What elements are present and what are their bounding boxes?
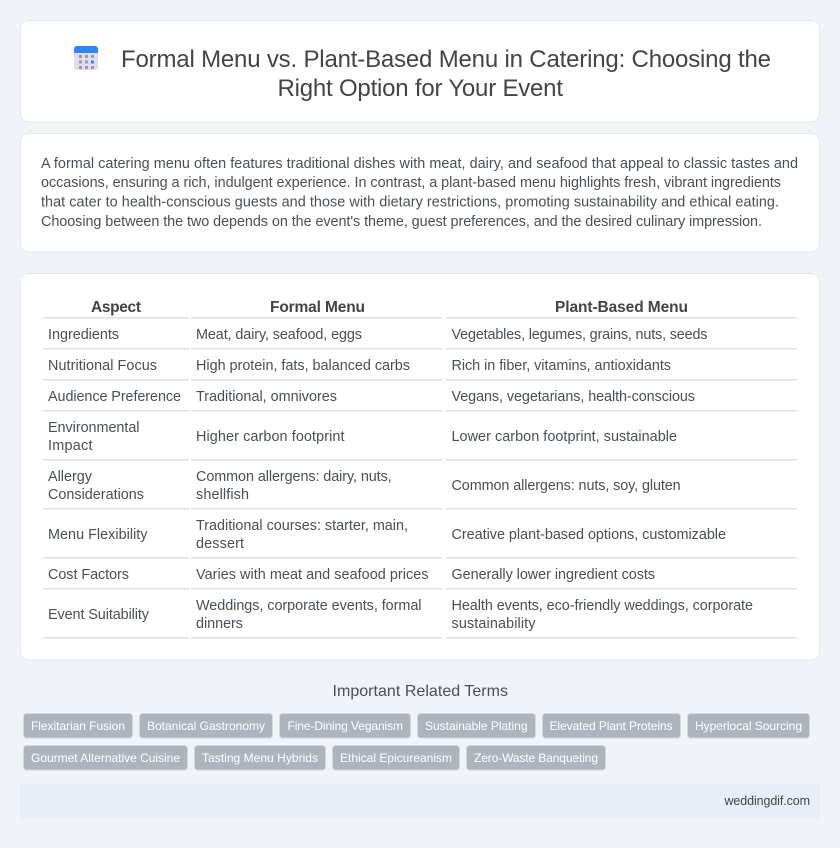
related term chips: Gourmet Alternative Cuisine <box>31 751 180 765</box>
panel: introduction text: A formal catering menu often features traditional dishes with meat, dairy, and seafood that appeal to classic tastes and <box>41 156 798 172</box>
row: menu flexibility: dessert <box>196 536 244 552</box>
row: allergy considerations: Considerations <box>48 487 144 503</box>
row: ingredients <box>48 327 708 343</box>
row: ingredients: Ingredients <box>48 327 119 343</box>
row: nutritional focus: Nutritional Focus <box>48 358 157 374</box>
related term chips: Elevated Plant Proteins <box>550 719 672 733</box>
title: Right Option for Your Event <box>278 75 563 102</box>
row: menu flexibility: Menu Flexibility <box>48 527 148 543</box>
related term chips: Botanical Gastronomy <box>147 719 265 733</box>
row: nutritional focus: High protein, fats, balanced carbs <box>196 358 410 374</box>
row: environmental impact: Impact <box>48 438 92 454</box>
row: environmental impact <box>48 420 677 454</box>
related term chips: Fine-Dining Veganism <box>288 719 403 733</box>
related term chips <box>24 714 810 770</box>
table header row: Plant-Based Menu <box>555 299 688 316</box>
row: audience preference <box>48 389 695 405</box>
related term chips: Ethical Epicureanism <box>340 751 452 765</box>
heading: important related terms: Important Related Terms <box>332 683 508 700</box>
icon: calendar <box>74 46 98 70</box>
row: audience preference: Traditional, omnivores <box>196 389 337 405</box>
row: nutritional focus: Rich in fiber, vitamins, antioxidants <box>452 358 671 374</box>
row: event suitability: Health events, eco-friendly weddings, corporate <box>452 598 753 614</box>
table header row: Formal Menu <box>270 299 365 316</box>
row: environmental impact: Lower carbon footprint, sustainable <box>452 429 677 445</box>
row: cost factors: Cost Factors <box>48 567 129 583</box>
footer <box>20 784 820 818</box>
row: nutritional focus <box>48 358 671 374</box>
footer: weddingdif.com <box>724 794 810 808</box>
panel: title header <box>20 20 820 122</box>
row: menu flexibility: Traditional courses: starter, main, <box>196 518 408 534</box>
panel: introduction text <box>20 134 820 252</box>
panel: comparison table <box>20 274 820 660</box>
panel: introduction text: that cater to health-conscious guests and those with dietary restrictions, promoting sustainability and ethical eating. <box>41 194 779 210</box>
table header row: Aspect <box>91 299 141 316</box>
row: cost factors <box>48 567 655 583</box>
row: cost factors: Generally lower ingredient costs <box>452 567 655 583</box>
row: ingredients: Meat, dairy, seafood, eggs <box>196 327 362 343</box>
row: cost factors: Varies with meat and seafood prices <box>196 567 428 583</box>
row: ingredients: Vegetables, legumes, grains, nuts, seeds <box>452 327 708 343</box>
table header row <box>91 299 688 316</box>
row: allergy considerations: Allergy <box>48 469 93 485</box>
row: event suitability: dinners <box>196 616 243 632</box>
row: menu flexibility <box>48 518 726 552</box>
row: environmental impact: Higher carbon footprint <box>196 429 344 445</box>
row: audience preference: Audience Preference <box>48 389 181 405</box>
panel: introduction text: occasions, ensuring a rich, indulgent experience. In contrast, a plant-based menu highlights fresh, vibrant ingredients <box>41 175 781 191</box>
title <box>121 46 771 102</box>
row: allergy considerations: shellfish <box>196 487 249 503</box>
row: menu flexibility: Creative plant-based options, customizable <box>452 527 726 543</box>
related term chips: Hyperlocal Sourcing <box>695 719 802 733</box>
panel: introduction text: Choosing between the two depends on the event's theme, guest preferences, and the desired culinary impression. <box>41 214 762 230</box>
row: event suitability: Event Suitability <box>48 607 150 623</box>
row: allergy considerations: Common allergens: dairy, nuts, <box>196 469 392 485</box>
row: event suitability <box>48 598 753 632</box>
related term chips: Flexitarian Fusion <box>31 719 125 733</box>
row: event suitability: Weddings, corporate events, formal <box>196 598 422 614</box>
row: allergy considerations: Common allergens: nuts, soy, gluten <box>452 478 681 494</box>
row: event suitability: sustainability <box>452 616 536 632</box>
title: Formal Menu vs. Plant-Based Menu in Catering: Choosing the <box>121 46 771 73</box>
related term chips: Sustainable Plating <box>425 719 528 733</box>
row: allergy considerations <box>48 469 681 503</box>
row: audience preference: Vegans, vegetarians, health-conscious <box>452 389 695 405</box>
row: environmental impact: Environmental <box>48 420 140 436</box>
related term chips: Zero-Waste Banqueting <box>474 751 598 765</box>
related term chips: Tasting Menu Hybrids <box>202 751 318 765</box>
